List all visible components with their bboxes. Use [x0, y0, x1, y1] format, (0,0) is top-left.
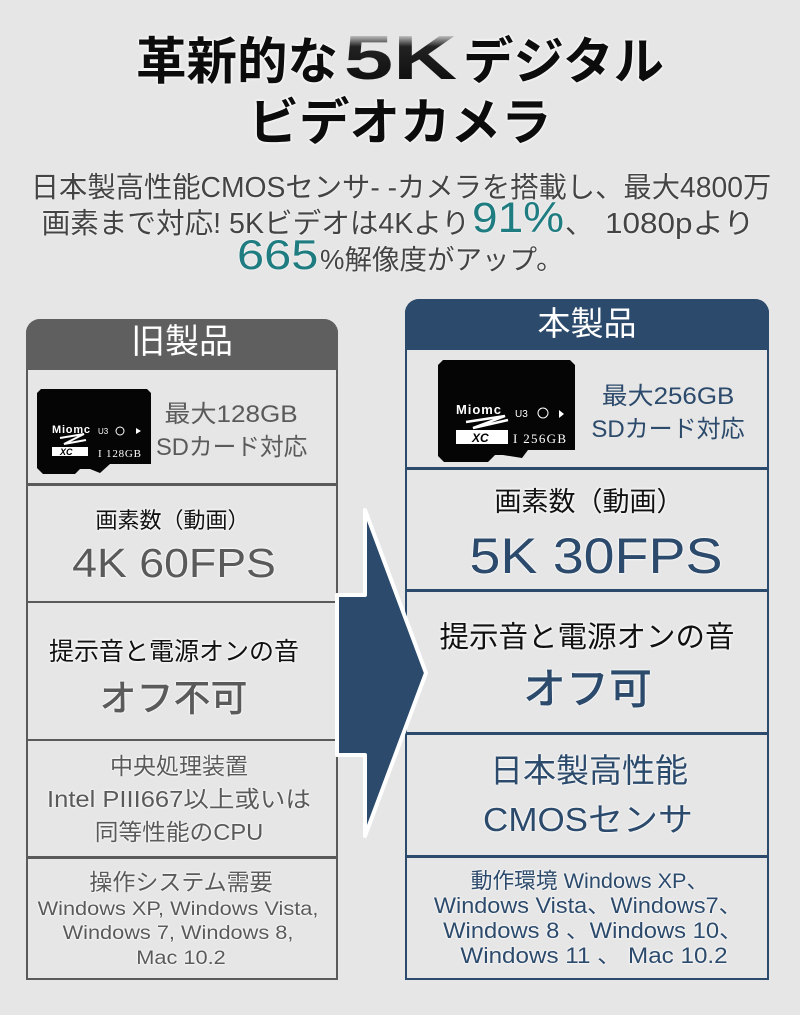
intro text: 日本製高性能CMOSセンサ- -カメラを搭載し、最大4800万	[31, 171, 771, 203]
icon: SD card 256GB: U3	[515, 409, 528, 420]
panel: old product	[26, 319, 338, 980]
text: max capacity	[156, 402, 307, 461]
text: max capacity	[591, 383, 745, 443]
text: max capacity: SDカード対応	[156, 435, 307, 461]
row: SD card	[28, 370, 336, 486]
icon: SD card 128GB: U3	[98, 427, 109, 436]
text: OS requirement: 操作システム需要	[89, 869, 273, 895]
row: OS	[434, 868, 743, 968]
text: sound label: 提示音と電源オンの音	[49, 638, 299, 666]
text: OS requirement: Windows XP, Windows Vista,	[38, 898, 318, 920]
text: CMOS sensor: CMOSセンサ	[483, 801, 693, 838]
text: sound label: 提示音と電源オンの音	[439, 621, 734, 654]
icon: SD card 128GB: Miomc	[52, 424, 90, 436]
text: OS requirement	[434, 868, 743, 968]
heading: old product: 旧製品	[131, 323, 233, 361]
intro text: 、	[565, 208, 594, 240]
intro text: 91%	[472, 194, 564, 242]
text: CPU requirement	[47, 753, 311, 845]
intro text: 1080pより	[605, 208, 755, 240]
text: pixels label: 画素数（動画）	[95, 508, 250, 533]
text: OS requirement: Windows 7, Windows 8,	[63, 922, 293, 944]
text: OS requirement: Windows 8 、Windows 10、	[443, 918, 743, 943]
text: OS requirement	[38, 869, 318, 969]
arrow	[335, 508, 428, 838]
row: sound	[407, 592, 767, 735]
intro text: 665	[237, 231, 318, 278]
text: sound off not allowed: オフ不可	[100, 678, 248, 719]
heading: this product: 本製品	[538, 305, 636, 342]
text: CPU requirement: Intel PIII667以上或いは	[47, 786, 311, 812]
title	[136, 24, 664, 151]
row: sensor	[407, 735, 767, 858]
icon: SD card 128GB: I 128GB	[98, 448, 141, 460]
title: 5K	[344, 24, 457, 92]
icon: SD card 128GB: XC	[59, 447, 73, 457]
intro text: 画素まで対応! 5Kビデオは4Kより	[42, 208, 470, 240]
text: 5K 30FPS: 5K 30FPS	[470, 528, 722, 584]
text: CPU requirement: 同等性能のCPU	[95, 819, 263, 845]
title: 革新的な	[136, 33, 338, 90]
row: resolution	[28, 486, 336, 603]
text: OS requirement: Windows Vista、Windows7、	[434, 893, 742, 918]
icon: SD card 256GB: XC	[471, 431, 489, 445]
text: max capacity: SDカード対応	[591, 416, 745, 443]
text: OS requirement: Windows 11 、 Mac 10.2	[460, 943, 728, 968]
text: max capacity: 最大256GB	[602, 383, 734, 410]
text: max capacity: 最大128GB	[164, 402, 298, 428]
heading: old product	[26, 319, 338, 370]
text: CMOS sensor	[483, 752, 693, 838]
title: ビデオカメラ	[248, 94, 552, 151]
intro text: %解像度がアップ。	[320, 244, 564, 275]
title: デジタル	[463, 33, 664, 90]
text: CPU requirement: 中央処理装置	[110, 753, 248, 779]
row: OS	[38, 869, 318, 969]
text: sound off allowed: オフ可	[523, 666, 652, 714]
icon: SD card 256GB	[438, 360, 575, 462]
icon: SD card 256GB: Miomc	[456, 402, 501, 417]
icon: SD card 128GB	[37, 389, 151, 474]
heading: this product	[405, 299, 769, 350]
row: resolution	[407, 470, 767, 592]
row: SD card	[407, 350, 767, 470]
text: CMOS sensor: 日本製高性能	[490, 752, 688, 789]
intro text	[31, 171, 771, 278]
text: 4K 60FPS: 4K 60FPS	[72, 540, 276, 586]
row: CPU	[28, 741, 336, 859]
text: OS requirement: Mac 10.2	[136, 947, 226, 969]
text: OS requirement: 動作環境 Windows XP、	[471, 868, 708, 893]
icon: SD card 256GB: I 256GB	[513, 431, 566, 446]
panel: this product	[405, 299, 769, 980]
text: pixels label: 画素数（動画）	[494, 487, 684, 517]
row: sound	[28, 603, 336, 741]
